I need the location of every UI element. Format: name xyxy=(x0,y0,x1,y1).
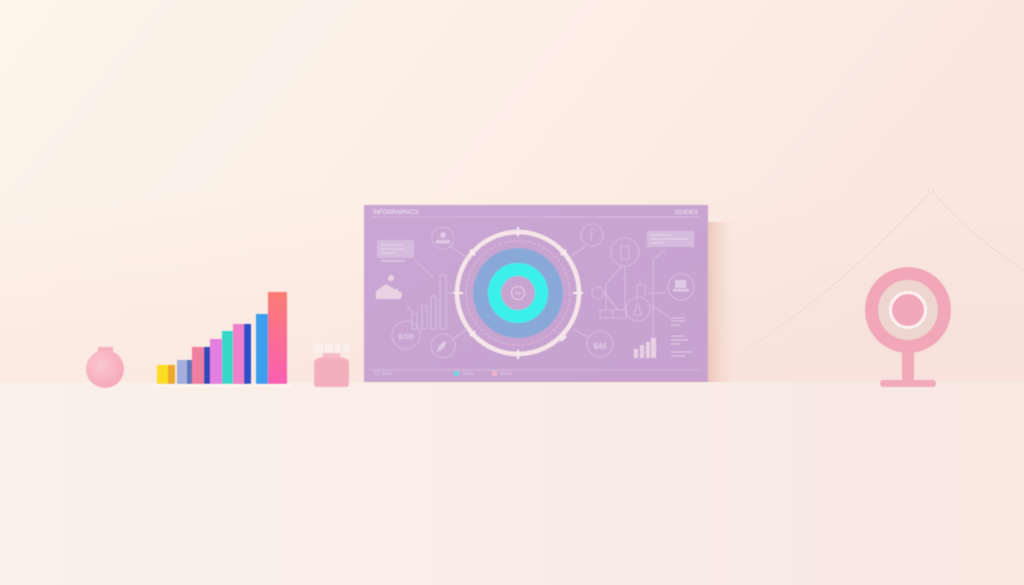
left callout box xyxy=(377,240,414,261)
left diagram icons xyxy=(392,227,468,358)
panel rules xyxy=(371,217,699,370)
pink ring target on stand xyxy=(865,267,951,387)
panel: purple dashboard xyxy=(364,205,708,382)
wall background xyxy=(0,0,1024,383)
3D bar chart xyxy=(150,292,293,387)
panel legend xyxy=(375,371,513,376)
panel legend: Index xyxy=(463,371,475,376)
right stat: $46 xyxy=(593,342,607,351)
house cluster icon xyxy=(376,275,402,299)
mini bar chart xyxy=(634,338,656,358)
right callout box xyxy=(647,231,694,247)
thin wall line xyxy=(740,188,1024,354)
panel heading left: INFOGRAPHICS xyxy=(373,210,419,216)
panel heading right: GUIDES xyxy=(675,210,698,216)
left stat: $209 xyxy=(398,334,414,341)
right notes xyxy=(671,318,693,356)
central radial chart xyxy=(453,227,583,359)
panel legend: Price xyxy=(382,371,393,376)
pink jar xyxy=(313,344,349,387)
floor xyxy=(0,382,1024,585)
wall shading xyxy=(0,0,1024,383)
right diagram icons xyxy=(571,224,694,357)
panel shadow xyxy=(708,222,736,382)
pink vase xyxy=(86,347,124,388)
panel legend: Share xyxy=(500,371,513,376)
